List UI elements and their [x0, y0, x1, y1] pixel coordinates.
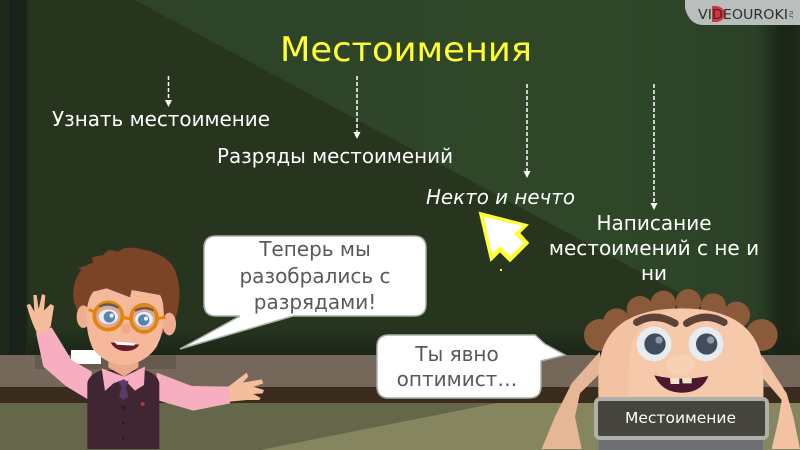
arms: [542, 352, 600, 449]
title: Местоимения: [280, 30, 532, 70]
mouth: [654, 375, 708, 393]
eyebrows: [637, 317, 675, 323]
outstretched hand: [228, 373, 264, 402]
arrow 2: [354, 76, 360, 139]
neck: [108, 357, 138, 377]
nose: [121, 323, 131, 333]
tie: [118, 380, 129, 400]
clothing: [598, 438, 763, 450]
step: find the pronoun: Узнать местоимение: [52, 107, 270, 131]
head: [73, 248, 179, 365]
chalkboard background: [0, 0, 800, 358]
cursor arrow icon: [480, 213, 528, 271]
name plate: Местоимение: [625, 409, 736, 427]
step: spelling with particles: местоимений с не и: [549, 236, 759, 260]
watermark: Videouroki: VIDEOUROKI: [698, 7, 788, 23]
buttons and badge: [122, 402, 145, 440]
speech bubble: monster: Ты явно: [414, 342, 499, 366]
arrow 4: [650, 84, 658, 210]
speech bubble: boy: разобрались с: [239, 264, 391, 288]
watermark: Videouroki: [685, 0, 800, 25]
arrow 1: [165, 76, 172, 107]
board tray and floor: [0, 355, 800, 450]
mouth: [111, 342, 139, 351]
step: spelling with particles: [549, 211, 759, 285]
speech bubble: monster: [377, 335, 565, 398]
body: [598, 308, 763, 450]
hair: [73, 248, 179, 333]
arrow 3: [524, 84, 530, 178]
step: spelling with particles: Написание: [596, 211, 712, 235]
collar: [102, 367, 145, 391]
nose: [667, 354, 695, 376]
glasses and eyes: [89, 302, 165, 332]
speech bubble: boy: Теперь мы: [258, 237, 371, 261]
character: boy: [27, 248, 264, 449]
outstretched arm: [157, 373, 230, 411]
vest: [87, 370, 159, 449]
hair: [584, 289, 778, 351]
speech bubble: boy: [180, 236, 426, 349]
step: pronoun classes: Разряды местоимений: [217, 144, 453, 168]
eyes: [637, 327, 723, 361]
speech bubble: monster: оптимист…: [397, 367, 517, 391]
face: [87, 288, 164, 365]
chalk piece: [71, 350, 101, 364]
character: pronoun monster: [542, 289, 800, 450]
speech bubble: boy: разрядами!: [254, 290, 376, 314]
ears: [77, 305, 90, 328]
watermark: Videouroki: .ru: [788, 11, 795, 19]
step: spelling with particles: ни: [641, 261, 667, 285]
raised arm: [36, 327, 92, 402]
raised hand: [27, 294, 54, 333]
teeth: [670, 378, 692, 384]
step: current topic: Некто и нечто: [426, 185, 575, 209]
name plate: [596, 399, 767, 438]
